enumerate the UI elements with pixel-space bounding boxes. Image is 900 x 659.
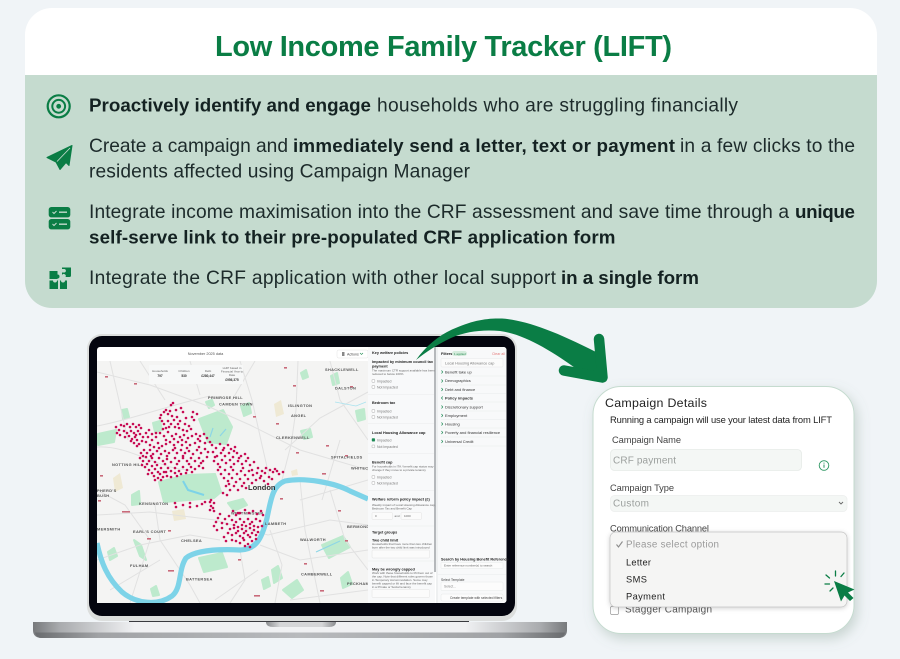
panel: key welfare policies: Welfare reform policy impact (£) — [372, 498, 430, 502]
map parks — [98, 370, 365, 598]
panel: key welfare policies: Key welfare policies — [372, 351, 408, 355]
map place labels: SPITALFIELDS — [331, 454, 363, 460]
laptop base — [33, 620, 567, 638]
panel: filters: Benefit take up — [445, 370, 472, 374]
map roads — [97, 361, 368, 603]
panel: key welfare policies: benefit capped or lift and face the benefit cap — [372, 582, 432, 586]
text: create a campaign: residents affected using Campaign Manager — [89, 162, 471, 182]
panel: LIFT summary card — [25, 8, 877, 308]
panel: key welfare policies: Impacted by minimum council tax — [372, 360, 434, 364]
dropdown menu: Payment — [626, 592, 665, 602]
panel: key welfare policies: reduced to below 100% — [372, 372, 404, 376]
panel: filters: 1 applied — [454, 352, 466, 356]
panel: filters: Demographics — [445, 378, 471, 383]
panel: key welfare policies: Work with these households to lift them out of — [372, 571, 433, 575]
text: create a campaign: immediately send a letter, text or payment — [293, 135, 676, 156]
stagger campaign checkbox: Stagger Campaign — [625, 604, 712, 616]
map place labels: CLERKENWELL — [276, 435, 310, 440]
panel: key welfare policies: Target groups — [372, 530, 397, 534]
map stats bar: Debt — [205, 369, 211, 373]
arrow: dashboard to campaign details — [416, 318, 602, 378]
panel: filters: Enter reference number(s) to search — [444, 564, 493, 568]
text: integrate income maximisation: self-serve link to their pre-populated CRF application form — [89, 226, 616, 248]
panel: key welfare policies: change if they move to a private tenancy — [372, 468, 426, 472]
panel: key welfare policies: Impacted — [377, 438, 391, 442]
map place labels: EARL'S COURT — [133, 529, 166, 534]
panel: filters: Clear all — [492, 352, 505, 356]
map stats bar: £280,447 — [201, 374, 215, 378]
field: campaign name: CRF payment — [613, 456, 676, 466]
text: integrate income maximisation: Integrate income maximisation into the CRF assessment and save time through a — [89, 202, 789, 223]
icon: checklist — [49, 207, 70, 229]
panel: key welfare policies: in a Private or Social tenancy — [372, 585, 411, 589]
map place labels: DALSTON — [335, 386, 356, 390]
map place labels — [97, 367, 384, 586]
panel: filters: Search by Housing Benefit Reference — [441, 558, 509, 562]
dropdown menu: Please select option — [626, 540, 719, 550]
panel: key welfare policies: the cap. Note that different rules govern those — [372, 574, 433, 578]
panel: key welfare policies: 0 — [375, 514, 377, 518]
map stats bar: Financial Year to — [221, 370, 243, 374]
map place labels: BATTERSEA — [186, 576, 213, 582]
panel: key welfare policies: For households in ITA / benefit cap status may — [372, 464, 434, 468]
map place labels: BUSH — [97, 493, 109, 498]
icon: click cursor — [825, 571, 854, 602]
map tinted blocks — [113, 400, 298, 521]
map of London — [97, 361, 384, 603]
panel: key welfare policies: May be wrongly capped — [372, 568, 416, 572]
text: proactively identify: households who are struggling financially — [377, 96, 738, 116]
map place labels: PHERD'S — [97, 488, 117, 493]
text: create a campaign: in a few clicks to the — [680, 136, 855, 157]
title: Low Income Family Tracker (LIFT) — [215, 31, 672, 63]
text: proactively identify — [89, 94, 738, 116]
panel: key welfare policies: and — [394, 514, 400, 518]
map place labels: CAMBERWELL — [301, 572, 333, 576]
panel: key welfare policies: Impacted — [377, 380, 391, 384]
map stats bar: £956,375 — [225, 378, 239, 382]
laptop bezel — [87, 334, 517, 621]
map lakes — [183, 481, 204, 495]
panel: key welfare policies: in Temporary Accommodation. Some may — [372, 578, 428, 582]
laptop screen — [97, 347, 509, 603]
map place labels: CHELSEA — [181, 538, 202, 543]
screen header: Actions — [347, 352, 359, 356]
text: proactively identify: Proactively identify and engage — [89, 94, 371, 116]
panel: key welfare policies: Not Impacted — [377, 416, 398, 420]
map river Thames — [97, 480, 368, 602]
map place labels: PRIMROSE HILL — [208, 395, 243, 400]
icon: target — [48, 95, 70, 117]
panel: key welfare policies: Impacted — [377, 410, 391, 414]
panel: key welfare policies: Local Housing Allowance cap — [372, 431, 426, 435]
panel: key welfare policies: Two child limit — [372, 538, 399, 542]
panel: key welfare policies: Not Impacted — [377, 386, 398, 390]
text: create a campaign — [89, 135, 855, 182]
panel: filters: Local Housing Allowance cap — [445, 362, 494, 366]
panel: filters: Discretionary support — [445, 404, 484, 410]
panel: filters: Select... — [444, 584, 456, 588]
panel: key welfare policies: born after the two child limit was introduced — [372, 546, 430, 550]
description: Running a campaign will use your latest data from LIFT — [610, 414, 832, 425]
panel: filters: Select Template — [441, 578, 465, 582]
map stats bar: 530 — [181, 374, 187, 378]
panel: key welfare policies: Impacted — [377, 476, 391, 480]
panel: key welfare policies: Not Impacted — [377, 445, 398, 449]
icon: paper plane — [47, 146, 72, 170]
laptop mockup — [33, 334, 567, 638]
panel: key welfare policies: Bedroom tax — [372, 401, 396, 405]
map place labels: WHITECHAPEL — [351, 466, 384, 470]
map stats bar: LHIP based in — [223, 366, 242, 370]
map place labels: WESTMINSTER — [231, 510, 264, 516]
heading: Campaign Details — [605, 396, 707, 410]
map stats bar — [149, 365, 243, 384]
dropdown menu: SMS — [626, 574, 647, 584]
panel: key welfare policies: payment — [372, 364, 388, 368]
text: integrate income maximisation: unique — [795, 201, 855, 222]
panel: key welfare policies: Bedroom Tax and Benefit Cap — [372, 506, 412, 510]
map stats bar: 797 — [157, 374, 163, 378]
map place labels: LAMBETH — [265, 521, 286, 526]
map place labels: BERMONDSEY — [347, 524, 378, 529]
panel: filters: Employment — [445, 413, 468, 418]
field: campaign name: Campaign Name — [612, 435, 681, 445]
icon: puzzle — [50, 268, 71, 289]
panel: key welfare policies: 1000 — [404, 514, 411, 518]
screen header: November 2025 data — [188, 352, 224, 356]
panel: filters: Universal Credit — [445, 439, 474, 444]
panel: filters: Poverty and financial resilience — [445, 430, 501, 435]
map stats bar: Households — [152, 369, 168, 373]
field: campaign type — [610, 483, 847, 512]
map stats bar: Date — [229, 373, 235, 377]
map station markers — [98, 367, 353, 597]
map place labels: ISLINGTON — [288, 403, 312, 408]
map place labels: WALWORTH — [300, 537, 326, 542]
map stats bar: Children — [178, 369, 190, 373]
field: communication channel: Communication Channel — [610, 524, 709, 534]
panel: filters: Create template with selected filters — [450, 596, 503, 600]
field: campaign type: Custom — [613, 498, 649, 510]
map place labels: CAMDEN TOWN — [219, 402, 253, 406]
screen header — [188, 350, 368, 358]
map place labels: KENSINGTON — [139, 501, 168, 506]
dropdown menu: Letter — [626, 558, 651, 568]
icon: info — [819, 461, 829, 470]
map household dots — [116, 403, 283, 547]
panel: filters: Policy impacts — [445, 396, 474, 400]
text: integrate income maximisation — [89, 201, 855, 248]
panel: key welfare policies: Benefit cap — [372, 460, 393, 464]
panel: filters: Debt and finance — [445, 387, 476, 392]
map place labels: PECKHAM — [347, 581, 369, 586]
map place labels: London — [248, 483, 276, 492]
panel: filters: Filters — [441, 352, 452, 356]
panel: campaign details — [593, 386, 854, 634]
field: campaign name — [610, 435, 802, 470]
field: campaign type: Campaign Type — [610, 483, 674, 493]
text: integrate CRF application: in a single form — [561, 267, 699, 288]
panel: filters — [438, 347, 509, 603]
map place labels: SHACKLEWELL — [325, 367, 359, 372]
panel: key welfare policies: Weekly impact of Local Housing Allowance cap, — [372, 503, 436, 507]
map place labels: ANGEL — [291, 413, 307, 418]
text: integrate CRF application: Integrate the CRF application with other local support — [89, 268, 557, 289]
map place labels: NOTTING HILL — [112, 462, 144, 467]
map place labels: FULHAM — [130, 563, 149, 568]
panel: key welfare policies: The maximum CTR support available has been — [372, 368, 435, 372]
text: create a campaign: Create a campaign and — [89, 136, 288, 157]
panel: key welfare policies: Not Impacted — [377, 482, 398, 486]
dropdown menu — [610, 532, 847, 607]
panel: key welfare policies — [368, 347, 438, 603]
panel: key welfare policies: Households that have more than two children — [372, 542, 433, 546]
map place labels: MERSMITH — [97, 526, 121, 532]
panel: filters: Housing — [445, 422, 460, 426]
